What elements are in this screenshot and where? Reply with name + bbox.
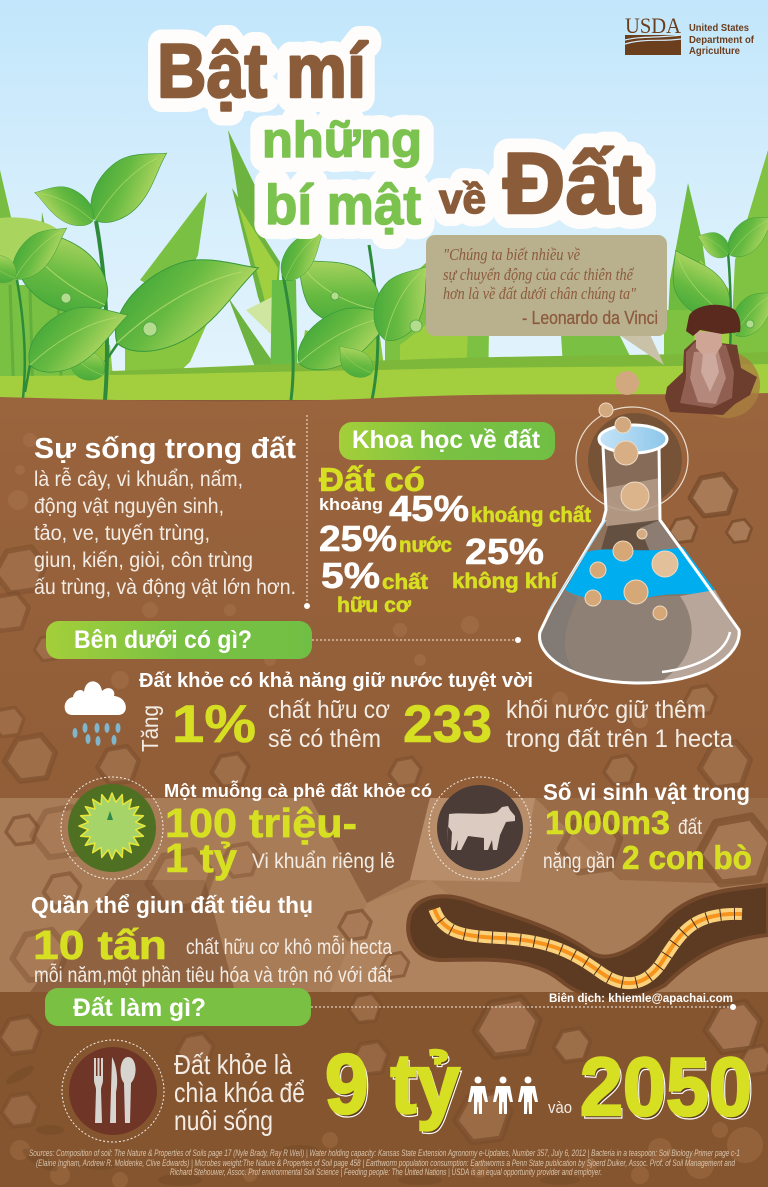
feeding text [174, 1049, 305, 1136]
title: Bật mí [157, 29, 369, 114]
water holding stat: 233 [403, 695, 492, 754]
soil composition stats: không khí [452, 570, 558, 593]
background: green field [0, 352, 768, 400]
soil composition stats: 25% [465, 531, 544, 572]
section text: life in soil: Sự sống trong đất [34, 433, 296, 465]
quote bubble: sự chuyển động của các thiên thể [443, 265, 634, 284]
big stat: 2050: 2050 [580, 1040, 752, 1133]
plant: centre seedling [271, 220, 444, 400]
sources: Richard Stehouwer, Assoc. Prof environmental Soil Science | Feeding people: The United Nations | USDA is an equal opportunity provider and employer. [170, 1167, 602, 1177]
USDA logo: Department of [689, 35, 755, 46]
worm [434, 908, 742, 983]
earthworm stat: 10 tấn [33, 922, 167, 968]
title: Đất [503, 136, 642, 232]
soil composition stats: khoáng chất [471, 504, 591, 527]
title: những [262, 112, 422, 168]
section text: life in soil: động vật nguyên sinh, [34, 495, 224, 518]
bacteria stat: 100 triệu- [165, 800, 357, 846]
translator credit: Biên dịch: khiemle@apachai.com [549, 991, 733, 1005]
section text: life in soil: ấu trùng, và động vật lớn hơn. [34, 576, 296, 599]
water holding stat: chất hữu cơ [268, 696, 390, 724]
feeding text: Đất khỏe là [174, 1049, 292, 1080]
section text: life in soil [34, 433, 296, 599]
heading pill: Bên dưới có gì?: Bên dưới có gì? [74, 626, 252, 654]
quote bubble: hơn là về đất dưới chân chúng ta" [443, 284, 637, 303]
soil composition stats [319, 461, 591, 617]
earthworm stat: mỗi năm,một phần tiêu hóa và trộn nó với đất [34, 964, 392, 987]
title: Bật mí [157, 29, 369, 114]
microbes stat: đất [678, 816, 702, 839]
microbes stat: 2 con bò [622, 839, 752, 876]
microbes stat: Số vi sinh vật trong [543, 779, 750, 805]
soil composition stats: Đất có [319, 461, 425, 498]
worm tunnel [408, 885, 768, 999]
title [157, 29, 642, 236]
title: về [439, 175, 486, 222]
soil composition stats: 5% [321, 555, 380, 596]
water holding stat: sẽ có thêm [268, 725, 381, 753]
big stat: 9 billion: 9 tỷ [327, 1040, 462, 1134]
microbes stat [543, 779, 752, 876]
quote bubble: - Leonardo da Vinci [522, 308, 658, 328]
icon: fork, knife, spoon [62, 1040, 164, 1142]
background: grass blades [0, 130, 768, 400]
USDA logo: Agriculture [689, 46, 740, 57]
heading pill: Khoa học về đất [339, 422, 555, 460]
plant: left seedling [0, 132, 272, 400]
feeding text: chìa khóa để [174, 1077, 305, 1108]
feeding text: nuôi sống [174, 1105, 273, 1136]
bacteria stat: Vi khuẩn riêng lẻ [252, 850, 395, 873]
earthworm stat: chất hữu cơ khô mỗi hecta [186, 936, 392, 959]
USDA logo: USDA [625, 13, 681, 38]
soil composition stats: chất [382, 571, 428, 594]
heading pill: Đất làm gì?: Đất làm gì? [73, 994, 206, 1022]
microbes stat: 1000m3 [545, 804, 670, 841]
USDA logo: United States [689, 23, 749, 34]
title: Đất [503, 136, 642, 232]
big stat: 9 billion: 9 tỷ [325, 1037, 460, 1131]
soil composition stats: khoảng [319, 495, 383, 514]
heading pill: Đất làm gì? [45, 988, 736, 1026]
water holding stat: Tăng [137, 705, 163, 752]
section text: life in soil: tảo, ve, tuyến trùng, [34, 522, 210, 545]
soil composition stats: nước [399, 534, 452, 557]
water holding stat: 1% [172, 695, 256, 754]
water holding stat [137, 670, 733, 754]
soil composition stats: hữu cơ [337, 594, 411, 617]
water holding stat: khối nước giữ thêm [506, 696, 706, 724]
title: những [262, 112, 422, 168]
soil background [0, 393, 768, 1187]
label: vào: vào [548, 1098, 572, 1117]
title: về [439, 175, 486, 222]
icon: rain cloud [65, 681, 126, 746]
sources [29, 1148, 740, 1177]
quote bubble [426, 235, 667, 365]
big stat: 2050: 2050 [582, 1043, 754, 1136]
pebble under bubble [615, 371, 639, 395]
soil composition stats: 25% [319, 518, 397, 559]
earthworm stat [31, 892, 392, 987]
microbes stat: nặng gần [543, 850, 615, 873]
quote bubble: "Chúng ta biết nhiều về [443, 245, 580, 264]
section text: life in soil: giun, kiến, giòi, côn trùng [34, 549, 253, 572]
flask [540, 403, 739, 683]
soil speckles [8, 433, 763, 1187]
bacteria stat [164, 780, 432, 881]
plant: right seedling [654, 204, 768, 400]
heading pill: Khoa học về đất: Khoa học về đất [352, 426, 541, 454]
bacteria stat: Một muỗng cà phê đất khỏe có [164, 780, 432, 801]
heading pill: Bên dưới có gì? [46, 621, 521, 659]
background: sky [0, 0, 768, 400]
icon: bacteria [61, 777, 163, 879]
section text: life in soil: là rễ cây, vi khuẩn, nấm, [34, 468, 243, 491]
earthworm stat: Quần thể giun đất tiêu thụ [31, 892, 313, 918]
icon: cow [429, 777, 531, 879]
soil composition stats: 45% [389, 488, 469, 529]
portrait: Leonardo da Vinci [665, 305, 760, 418]
bacteria stat: 1 tỷ [165, 835, 237, 881]
title: bí mật [265, 173, 421, 236]
title: bí mật [265, 173, 421, 236]
icon: three people [468, 1076, 538, 1114]
water holding stat: trong đất trên 1 hecta [506, 725, 733, 753]
soil rocks and pebbles [0, 474, 768, 1142]
water holding stat: Đất khỏe có khả năng giữ nước tuyệt vời [139, 670, 533, 692]
divider: vertical dotted [304, 415, 310, 609]
USDA logo [625, 13, 755, 57]
